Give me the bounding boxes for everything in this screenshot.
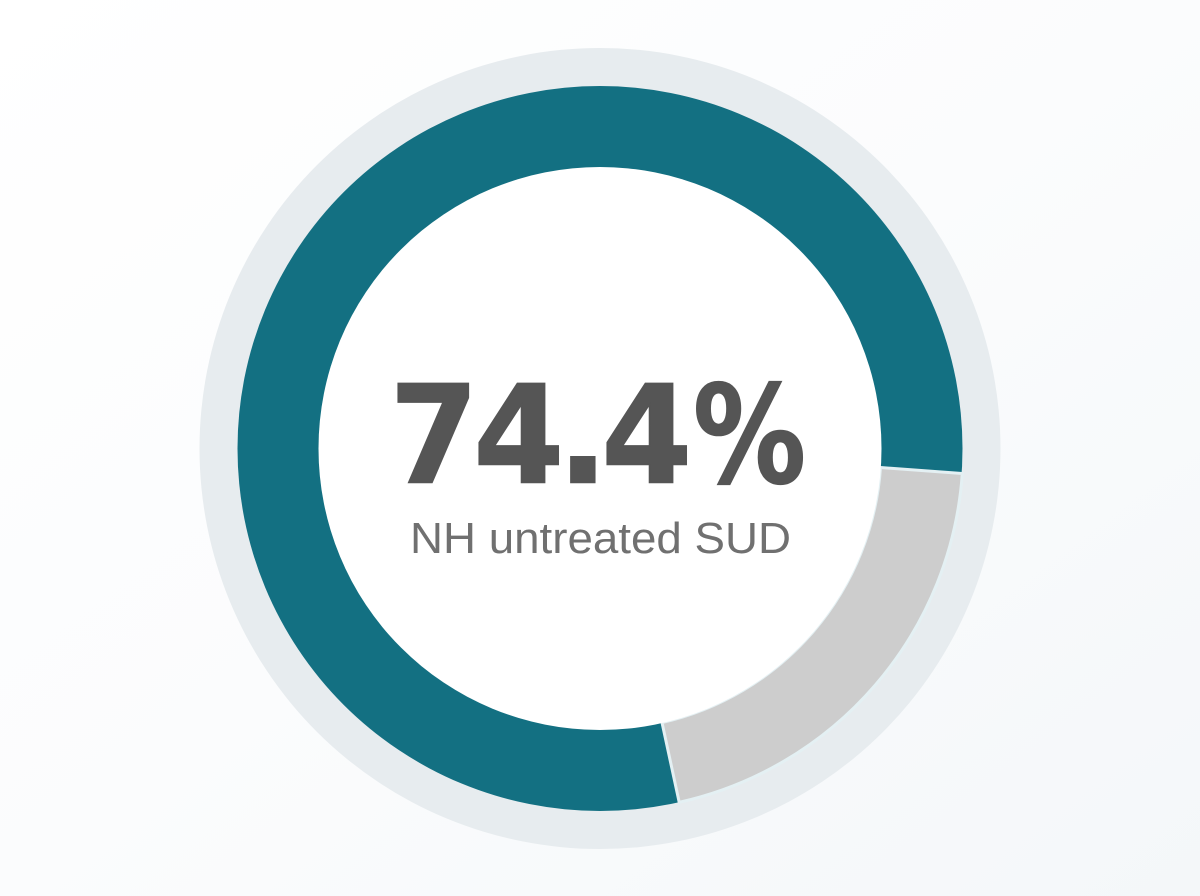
percentage value: 4: [473, 358, 564, 516]
caption: NH untreated SUD: [410, 514, 791, 563]
teal segment: 74.4% untreated: [238, 86, 962, 811]
grey segment: remainder: [662, 468, 962, 802]
percentage value: 4: [601, 358, 692, 516]
inner white circle: [318, 167, 882, 730]
center label: [390, 358, 806, 563]
outer background ring: [200, 48, 1000, 849]
donut chart: [200, 48, 1000, 849]
percentage value: %: [693, 358, 806, 516]
percentage value: 7: [390, 358, 479, 516]
percentage value: .: [557, 358, 609, 516]
